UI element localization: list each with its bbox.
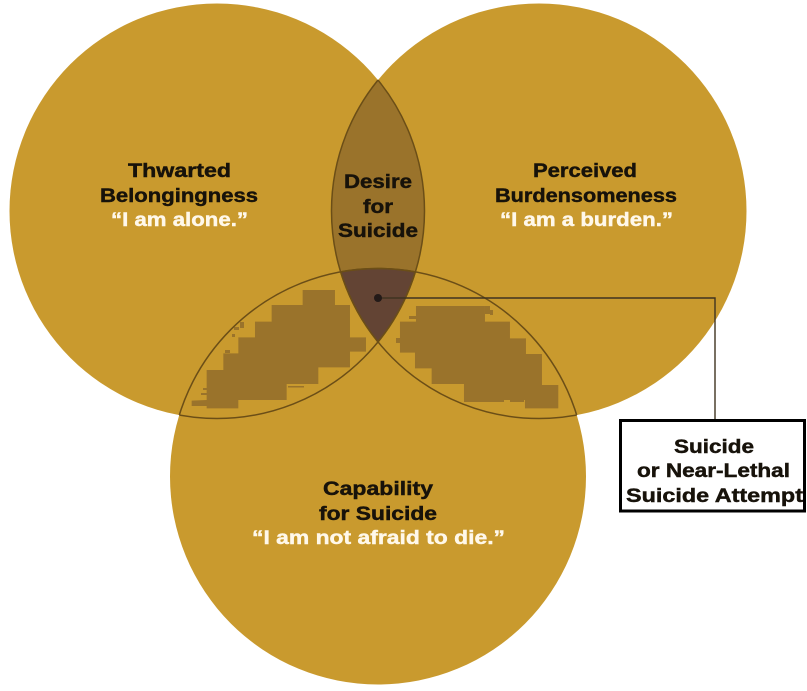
- connector dot: [374, 294, 382, 302]
- patch: left overlap: [192, 290, 366, 408]
- label: capability for suicide: [252, 478, 505, 549]
- label: capability for suicide: “I am not afraid to die.”: [252, 527, 505, 549]
- callout box: or Near-Lethal: [637, 460, 790, 482]
- callout box: Suicide: [674, 436, 754, 458]
- label: thwarted belongingness: Thwarted: [128, 160, 231, 182]
- circle: thwarted belongingness: [10, 4, 424, 418]
- callout box: [620, 420, 804, 511]
- label: thwarted belongingness: [100, 160, 258, 231]
- callout box: Suicide Attempt: [626, 485, 804, 507]
- label: desire for suicide: Suicide: [338, 220, 418, 242]
- label: desire for suicide: [338, 171, 418, 242]
- circle: capability for suicide: [170, 268, 586, 684]
- label: perceived burdensomeness: Perceived: [533, 160, 637, 182]
- patch: right overlap: [396, 306, 558, 408]
- circle outlines: [178, 80, 578, 420]
- label: capability for suicide: for Suicide: [319, 503, 437, 525]
- label: capability for suicide: Capability: [323, 478, 433, 500]
- label: perceived burdensomeness: [495, 160, 677, 231]
- label: desire for suicide: for: [363, 196, 393, 218]
- label: perceived burdensomeness: Burdensomeness: [495, 185, 677, 207]
- overlap: desire for suicide: [332, 82, 424, 271]
- connector line to callout: [378, 298, 715, 420]
- overlap: suicide or near-lethal attempt: [342, 269, 414, 340]
- label: desire for suicide: Desire: [344, 171, 412, 193]
- label: thwarted belongingness: Belongingness: [100, 185, 258, 207]
- circle: perceived burdensomeness: [332, 4, 746, 418]
- label: perceived burdensomeness: “I am a burden.”: [500, 209, 673, 231]
- label: thwarted belongingness: “I am alone.”: [111, 209, 248, 231]
